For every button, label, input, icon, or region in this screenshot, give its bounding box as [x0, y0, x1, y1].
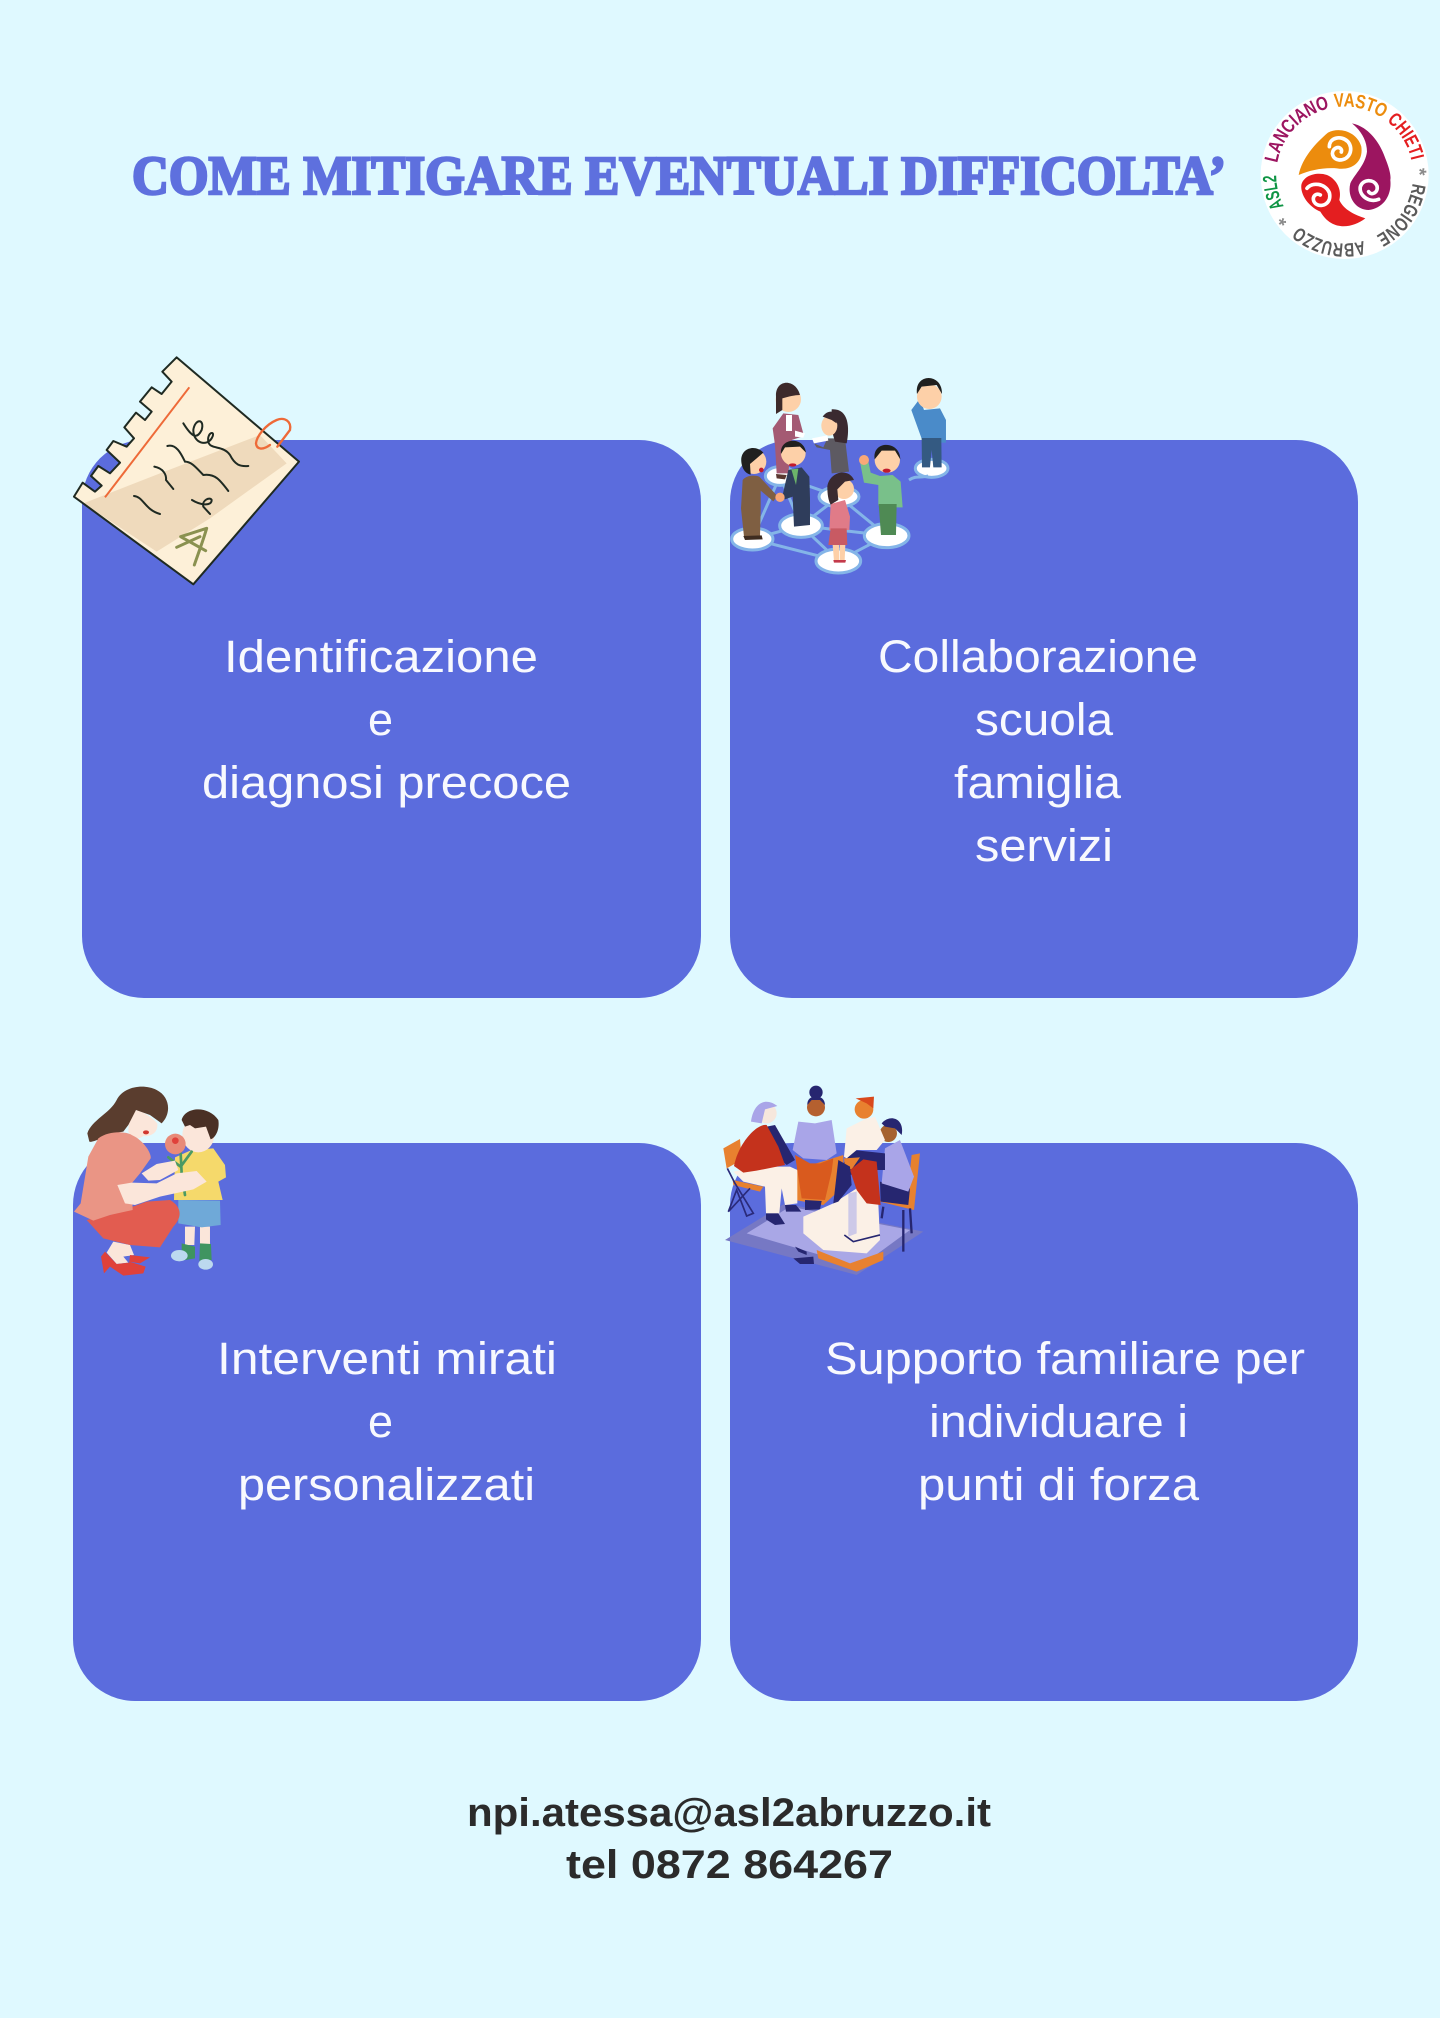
icon: notebook page: [74, 357, 299, 584]
panel: identificazione e diagnosi precoce: Identificazione: [224, 631, 538, 682]
man in blue: [911, 378, 946, 467]
panel: collaborazione scuola famiglia servizi: scuola: [975, 694, 1114, 745]
far right man: [880, 1118, 920, 1252]
logo: ASL2 Lanciano Vasto Chieti: *: [1419, 168, 1426, 176]
man in brown: [741, 448, 777, 540]
woman in maroon: [773, 383, 805, 479]
right man in white: [833, 1097, 885, 1203]
logo: ASL2 Lanciano Vasto Chieti: ABRUZZO: [1293, 228, 1364, 257]
panel: identificazione e diagnosi precoce: [82, 440, 701, 998]
woman in grey: [812, 409, 849, 473]
icon: network of people: [732, 378, 948, 573]
logo: ASL2 Lanciano Vasto Chieti: CHIETI: [1389, 113, 1424, 160]
title: COME MITIGARE EVENTUALI DIFFICOLTA’: [132, 145, 1226, 206]
man in green: [859, 445, 903, 535]
panel: identificazione e diagnosi precoce: diagnosi precoce: [202, 757, 571, 808]
panel: supporto familiare: punti di forza: [918, 1459, 1200, 1510]
contact email: npi.atessa@asl2abruzzo.it: [467, 1791, 991, 1835]
logo: ASL2 Lanciano Vasto Chieti: [1260, 91, 1429, 259]
panel: interventi mirati e personalizzati: Interventi mirati: [217, 1333, 557, 1384]
left person: [733, 1102, 801, 1225]
panel: supporto familiare: individuare i: [929, 1396, 1188, 1447]
contact phone: tel 0872 864267: [566, 1843, 893, 1887]
logo: ASL2 Lanciano Vasto Chieti: *: [1278, 218, 1286, 226]
panel: supporto familiare: Supporto familiare per: [825, 1333, 1305, 1384]
panel: interventi mirati e personalizzati: [73, 1143, 701, 1701]
flower: [165, 1134, 192, 1195]
logo: ASL2 Lanciano Vasto Chieti: LANCIANO: [1264, 96, 1328, 162]
panel: supporto familiare: [730, 1143, 1358, 1701]
icon: support group circle: [723, 1086, 923, 1275]
center woman: [793, 1086, 837, 1210]
left chair: [723, 1139, 763, 1216]
icon: mother and child with flower: [74, 1087, 226, 1276]
child: [171, 1109, 226, 1270]
panel: interventi mirati e personalizzati: e: [368, 1396, 393, 1447]
logo: ASL2 Lanciano Vasto Chieti: VASTO: [1334, 93, 1387, 116]
logo: ASL2 Lanciano Vasto Chieti: ASL2: [1262, 176, 1284, 208]
woman in pink: [827, 473, 854, 563]
panel: collaborazione scuola famiglia servizi: [730, 440, 1358, 998]
panel: identificazione e diagnosi precoce: e: [368, 694, 393, 745]
man in suit: [775, 441, 810, 527]
mother arms: [117, 1161, 207, 1205]
front woman: [793, 1159, 883, 1272]
orange sofa back: [795, 1155, 843, 1205]
panel: collaborazione scuola famiglia servizi: Collaborazione: [878, 631, 1198, 682]
mother top and head: [74, 1087, 168, 1221]
panel: collaborazione scuola famiglia servizi: servizi: [975, 820, 1113, 871]
logo: ASL2 Lanciano Vasto Chieti: REGIONE: [1376, 184, 1426, 247]
panel: interventi mirati e personalizzati: personalizzati: [238, 1459, 535, 1510]
mother skirt and shoes: [87, 1200, 180, 1276]
panel: collaborazione scuola famiglia servizi: famiglia: [954, 757, 1122, 808]
